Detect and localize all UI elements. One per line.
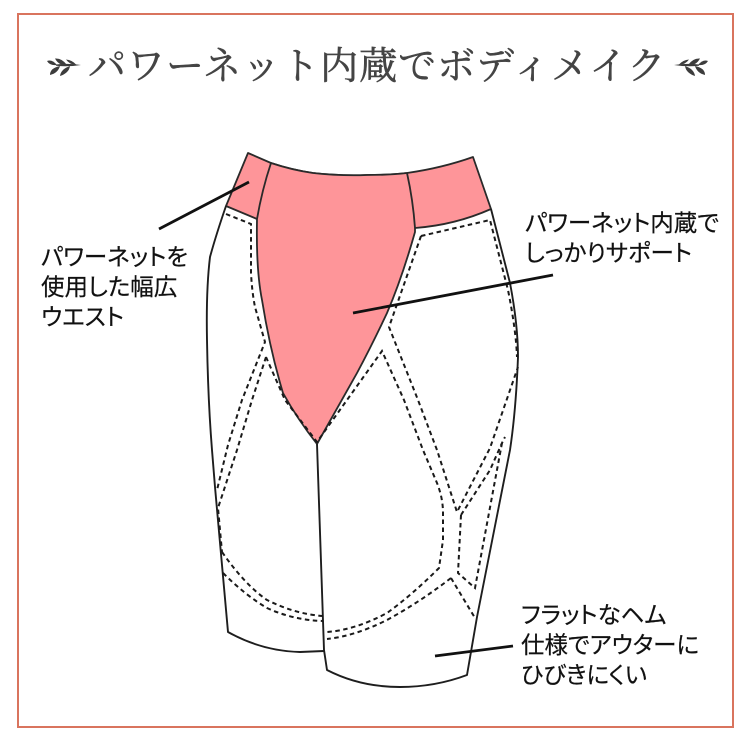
label: wide waist: [41, 244, 188, 330]
stitching dashes: [217, 214, 518, 639]
pink waistband: [226, 153, 491, 228]
label: wide waist: パワーネットを: [41, 244, 188, 270]
label: flat hem: 仕様でアウターに: [521, 632, 699, 658]
garment outlines: [207, 206, 518, 687]
label: wide waist: ウエスト: [41, 304, 124, 330]
label: flat hem: [521, 602, 699, 688]
icon: right leaf ornament: [674, 58, 708, 76]
label: power net support: しっかりサポート: [525, 240, 692, 266]
icon: left leaf ornament: [47, 58, 81, 76]
title: パワーネット内蔵でボディメイク: [88, 46, 667, 88]
label: power net support: パワーネット内蔵で: [525, 210, 719, 236]
label: flat hem: ひびきにくい: [521, 662, 647, 688]
pink centre panel: [257, 163, 415, 444]
label: power net support: [525, 210, 719, 266]
label: flat hem: フラットなヘム: [521, 602, 666, 628]
label: wide waist: 使用した幅広: [41, 274, 177, 300]
